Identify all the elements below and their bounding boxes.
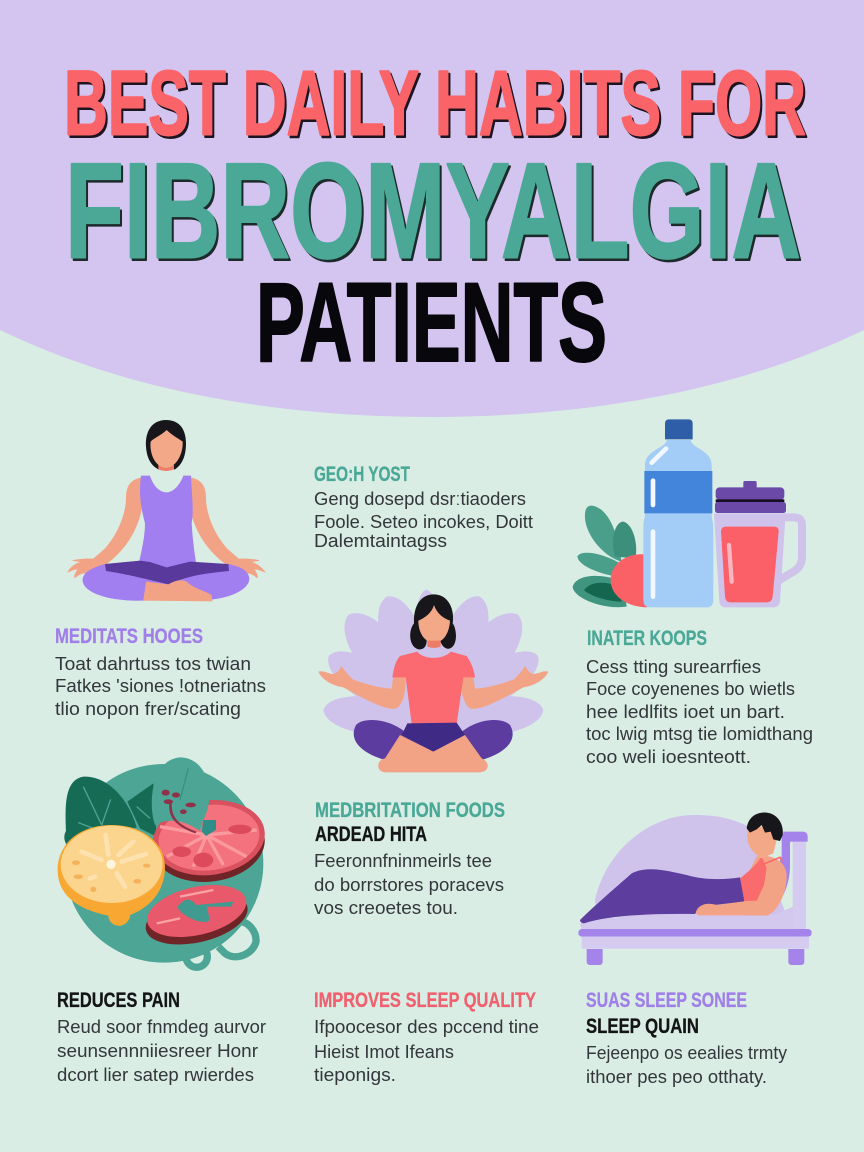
coral t-shirt	[392, 652, 475, 724]
juice highlight	[729, 545, 732, 582]
cup body	[714, 513, 786, 607]
body	[314, 1016, 539, 1085]
neck	[158, 465, 174, 471]
icon: woman resting in bed	[578, 813, 812, 965]
heading: INATER KOOPS	[587, 627, 707, 650]
body: Foole. Seteo incokes, Doitt	[314, 511, 533, 532]
text block: sleep	[586, 989, 788, 1087]
text block: water	[586, 627, 813, 767]
body: tlio nopon frer/scating	[55, 698, 241, 719]
teal plate	[65, 764, 263, 963]
body: tieponigs.	[314, 1064, 396, 1085]
body: dcort lier satep rwierdes	[57, 1064, 254, 1085]
body: Fatkes 'siones !otneriatns	[55, 675, 266, 696]
body: hee ledlfits ioet un bart.	[586, 701, 785, 722]
body: Hieist Imot Ifeans	[314, 1041, 454, 1062]
body: Reud soor fnmdeg aurvor	[57, 1016, 266, 1037]
icon: meditating woman in purple top	[67, 420, 266, 601]
text block: improves sleep quality	[314, 989, 539, 1085]
heading: IMPROVES SLEEP QUALITY	[314, 989, 536, 1012]
lotus petals	[318, 589, 548, 742]
bottle label	[644, 471, 712, 513]
forearm	[696, 900, 773, 915]
legs	[354, 720, 513, 760]
icon: healthy foods plate	[58, 757, 269, 967]
title line 3: PATIENTS	[256, 260, 607, 385]
coral fruit	[611, 554, 647, 607]
body: Geng dosepd dsrːtiaoders	[314, 488, 526, 509]
heading: REDUCES PAIN	[57, 989, 180, 1012]
body: Feeronnfninmeirls tee	[314, 850, 492, 871]
leaf veins	[78, 787, 150, 828]
body	[55, 653, 266, 719]
lower tomato slice	[141, 876, 253, 953]
bed base	[582, 937, 809, 949]
short hair	[747, 813, 783, 841]
icon: seated woman with lotus petals	[318, 589, 548, 772]
shorts	[402, 723, 465, 752]
torso skin	[740, 856, 787, 915]
bottle	[643, 440, 713, 607]
body	[586, 656, 813, 767]
citrus half	[58, 825, 165, 926]
herb sprig	[162, 790, 197, 833]
hair	[410, 594, 456, 649]
juice	[721, 527, 779, 602]
heading: GEO:H YOST	[314, 463, 410, 486]
bottle cap	[665, 419, 693, 439]
leaves	[573, 506, 636, 607]
body: coo weli ioesnteott.	[586, 746, 751, 767]
mattress	[580, 907, 793, 929]
rings	[186, 922, 256, 967]
text block: foods	[314, 799, 505, 918]
lavender backdrop	[595, 815, 787, 917]
text block: reduces pain	[57, 989, 266, 1085]
body: do borrstores poracevs	[314, 874, 504, 895]
arms and hands	[318, 666, 405, 709]
dark leaves	[64, 777, 157, 845]
title	[64, 52, 808, 385]
text block: meditation	[55, 625, 266, 719]
teal stem tip	[202, 820, 216, 836]
heading: MEDITATS HOOES	[55, 625, 203, 648]
heading line 1: MEDBRITATION FOODS	[315, 799, 505, 822]
top tomato slice	[149, 794, 269, 888]
shorts	[105, 561, 229, 584]
face and neck	[418, 605, 450, 643]
heading line 2: SLEEP QUAIN	[586, 1015, 699, 1038]
body	[57, 1016, 266, 1085]
body: Ifpoocesor des pccend tine	[314, 1016, 539, 1037]
crossed lower legs	[378, 735, 488, 772]
icon: water bottle, juice cup and leaves	[573, 419, 802, 607]
body	[586, 1042, 788, 1087]
coral top	[740, 856, 767, 901]
body: Toat dahrtuss tos twian	[55, 653, 251, 674]
body: vos creoetes tou.	[314, 897, 458, 918]
top strap	[764, 857, 782, 864]
body: toc lwig mtsg tie lomidthang	[586, 723, 813, 744]
bed frame bar	[578, 929, 812, 937]
legs	[83, 564, 249, 601]
body	[314, 488, 533, 551]
purple tank top	[138, 476, 197, 566]
pillow	[767, 833, 793, 912]
head	[747, 827, 777, 858]
body: Dalemtaintagss	[314, 530, 447, 551]
heading line 1: SUAS SLEEP SONEE	[586, 989, 747, 1012]
body: Fejeenpo os eealies trmty	[586, 1042, 788, 1063]
heading line 2: ARDEAD HITA	[315, 823, 427, 846]
headboard	[793, 840, 806, 929]
body: Cess tting surearrfies	[586, 656, 761, 677]
hair	[146, 420, 186, 469]
body: Foce coyenenes bo wietls	[586, 678, 795, 699]
light teal leaf	[152, 757, 209, 831]
body: seunsennniiesreer Honr	[57, 1040, 258, 1061]
cup handle	[778, 517, 802, 581]
header background: lavender dome	[0, 0, 864, 417]
arms and hands	[67, 478, 142, 578]
bottle highlights	[652, 449, 666, 597]
body	[314, 850, 504, 918]
feet	[143, 580, 212, 601]
cup lid	[715, 481, 786, 513]
bed legs	[587, 949, 804, 965]
body: ithoer pes peo otthaty.	[586, 1066, 767, 1087]
face	[150, 430, 183, 468]
text block: top center	[314, 463, 533, 551]
blanket	[580, 869, 744, 923]
